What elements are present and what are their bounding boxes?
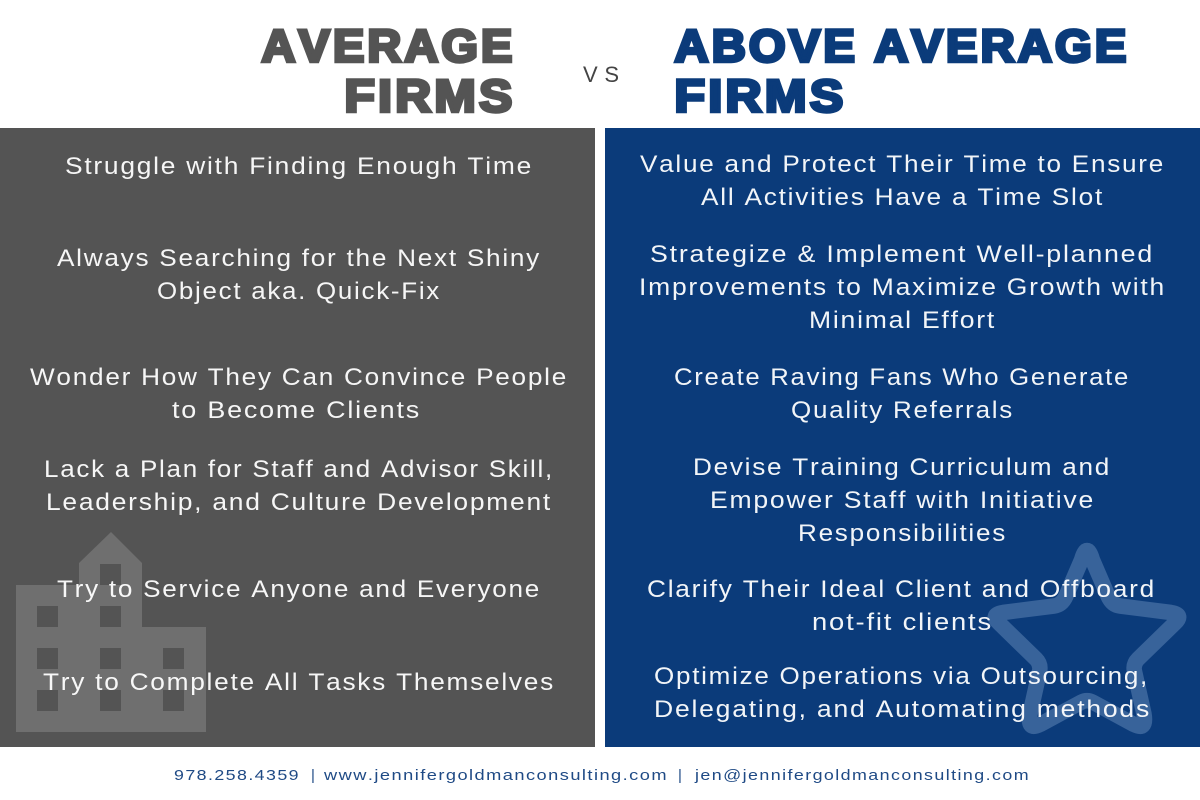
panel: average firms [0,128,595,747]
list: above average firm traits: Create Raving Fans Who Generate [674,364,1130,391]
list: above average firm traits: All Activities Have a Time Slot [701,184,1104,211]
list: average firm traits: Try to Service Anyone and Everyone [57,576,541,603]
icon: building [16,532,206,732]
list: above average firm traits: Clarify Their Ideal Client and Offboard [647,576,1156,603]
list: above average firm traits [639,151,1166,723]
heading: above average firms [674,20,1130,121]
list: above average firm traits: not-fit clients [812,609,993,636]
footer contact line: jen@jennifergoldmanconsulting.com [694,767,1030,784]
heading: above average firms: FIRMS [674,70,846,121]
list: average firm traits [30,153,568,696]
list: above average firm traits: Responsibilities [798,520,1007,547]
list: above average firm traits: Minimal Effort [809,307,996,334]
heading: average firms: FIRMS [344,70,516,121]
list: above average firm traits: Value and Protect Their Time to Ensure [640,151,1165,178]
list: above average firm traits: Empower Staff with Initiative [710,487,1095,514]
panel: above average firms [605,128,1200,747]
footer contact line: | [678,767,683,784]
list: average firm traits: Struggle with Finding Enough Time [65,153,533,180]
heading: average firms [262,20,516,121]
list: above average firm traits: Delegating, and Automating methods [654,696,1151,723]
list: average firm traits: Always Searching for the Next Shiny [57,245,541,272]
list: average firm traits: Object aka. Quick-Fix [157,278,441,305]
list: average firm traits: Lack a Plan for Staff and Advisor Skill, [44,456,554,483]
list: above average firm traits: Strategize & Implement Well-planned [650,241,1154,268]
list: above average firm traits: Quality Referrals [791,397,1014,424]
list: above average firm traits: Improvements to Maximize Growth with [639,274,1166,301]
heading: average firms: AVERAGE [262,20,516,71]
footer contact line: | [311,767,316,784]
list: average firm traits: Leadership, and Culture Development [46,489,552,516]
vs label: VS [583,62,619,87]
list: average firm traits: Wonder How They Can Convince People [30,364,568,391]
footer contact line [174,767,1030,784]
list: above average firm traits: Devise Training Curriculum and [693,454,1111,481]
footer contact line: www.jennifergoldmanconsulting.com [323,767,668,784]
list: above average firm traits: Optimize Operations via Outsourcing, [654,663,1149,690]
heading: above average firms: ABOVE AVERAGE [674,20,1130,71]
icon: star [995,550,1179,726]
list: average firm traits: Try to Complete All Tasks Themselves [43,669,555,696]
list: average firm traits: to Become Clients [172,397,421,424]
footer contact line: 978.258.4359 [174,767,300,784]
